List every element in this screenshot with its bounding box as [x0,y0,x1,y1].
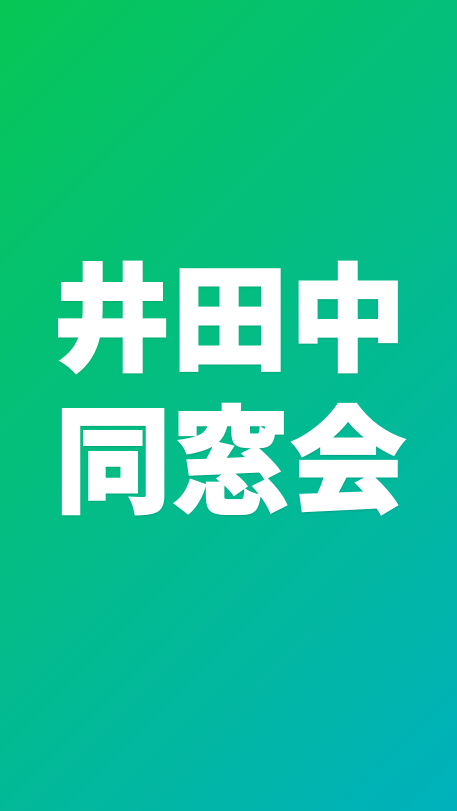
title glyph 中: 中 [290,256,406,386]
title glyph 井: 井 [54,256,170,386]
title glyph 田: 田 [172,256,288,386]
title glyph 会: 会 [290,398,406,528]
title glyph 窓: 窓 [173,398,289,528]
title glyph 同: 同 [55,398,171,528]
